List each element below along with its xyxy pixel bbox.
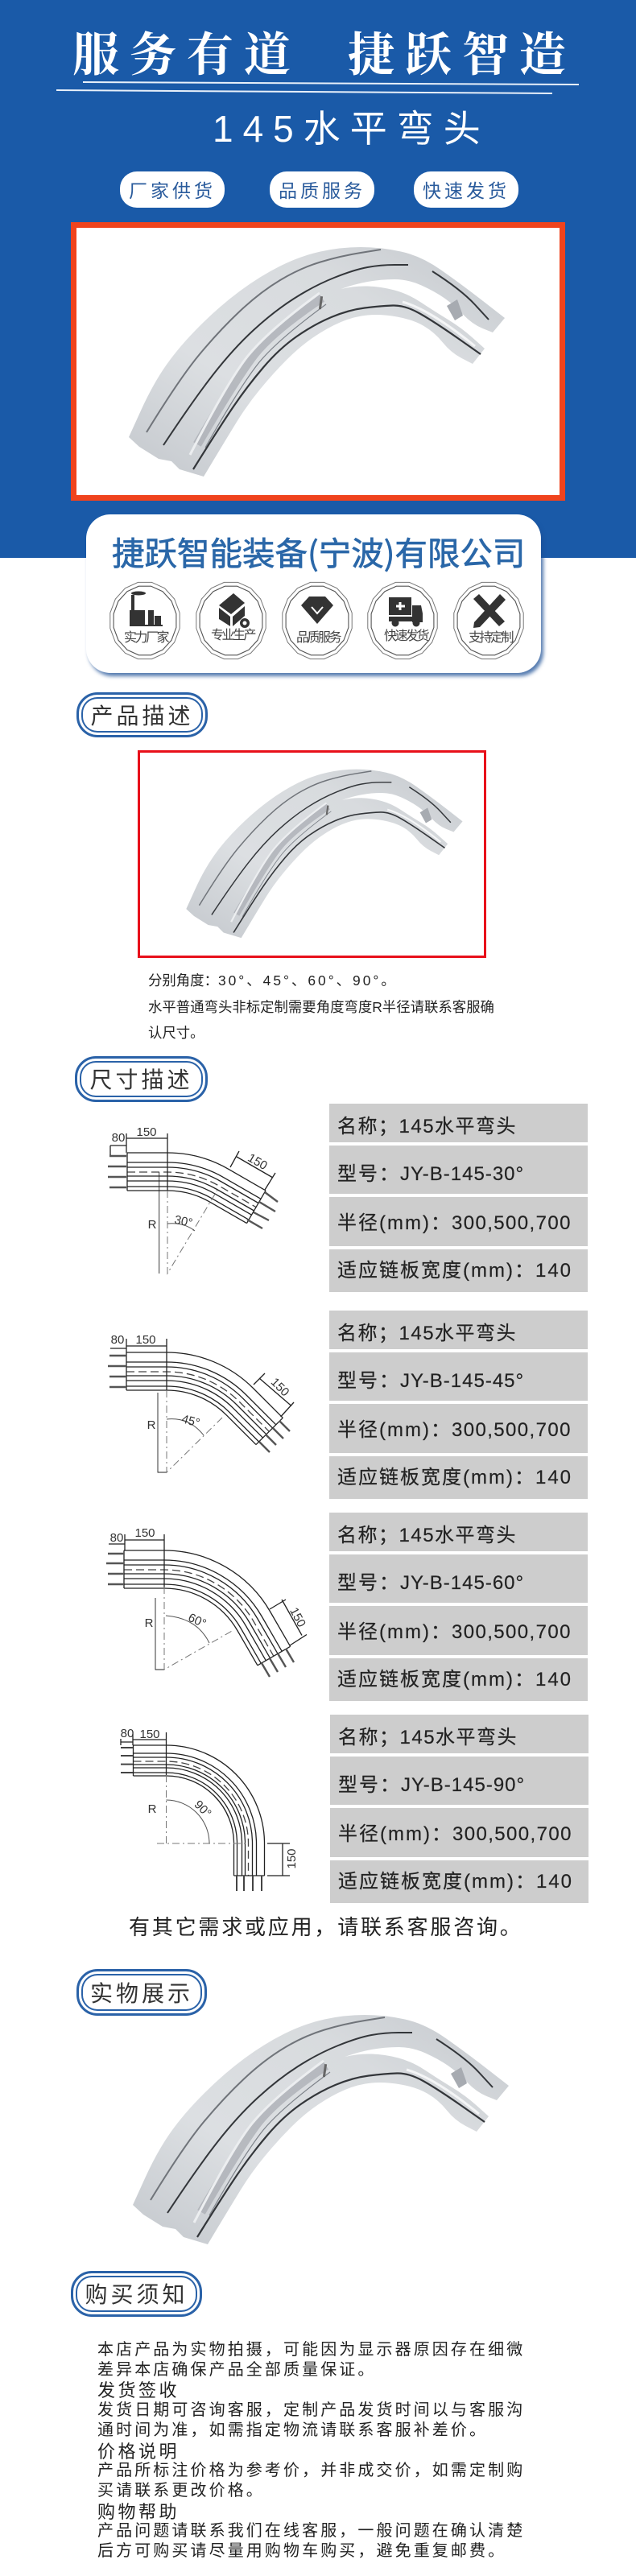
- dimension drawing: 45 degrees: 80: [111, 1333, 124, 1347]
- title underline strokes: [56, 82, 579, 93]
- subtitle: 145水平弯头: [213, 108, 490, 150]
- panel: description product frame: [138, 750, 486, 958]
- description text: 分别角度：30°、45°、60°、90°。: [148, 972, 398, 989]
- dimension drawing: 90 degrees: R: [148, 1802, 157, 1816]
- section tag: 产品描述: 产品描述: [90, 699, 193, 731]
- pill: 品质服务: [270, 171, 374, 208]
- spec table: 30 degrees: 型号：JY-B-145-30°: [337, 1163, 524, 1185]
- icon: pencil and ruler: [473, 594, 506, 628]
- spec table: 90 degrees: [330, 1715, 589, 1903]
- icon: box and gear: [219, 593, 250, 628]
- dimension drawing: 90 degrees: 90°: [192, 1798, 214, 1820]
- notes text block: 差异本店确保产品全部质量保证。: [97, 2361, 377, 2379]
- dimension drawing: 90 degrees: 150: [139, 1728, 160, 1741]
- spec table: 90 degrees: 适应链板宽度(mm)：140: [338, 1871, 573, 1893]
- badge: 实力厂家: 实力厂家: [124, 630, 169, 645]
- spec table: 30 degrees: 名称；145水平弯头: [337, 1116, 517, 1137]
- contact note: 有其它需求或应用，请联系客服咨询。: [129, 1915, 523, 1939]
- spec table: 90 degrees: 名称；145水平弯头: [338, 1727, 518, 1748]
- product photo: main: [129, 247, 505, 477]
- dimension drawing: 60 degrees: 60°: [186, 1611, 209, 1631]
- badge: 快速发货: [368, 582, 437, 659]
- icon: factory: [130, 591, 163, 626]
- notes text block: 价格说明: [97, 2442, 180, 2462]
- company name: 捷跃智能装备(宁波)有限公司: [112, 527, 525, 575]
- badge: 实力厂家: [110, 582, 180, 659]
- badge: 专业生产: [196, 582, 266, 659]
- notes text block: 发货日期可咨询客服，定制产品发货时间以与客服沟: [97, 2401, 525, 2419]
- dimension drawing: 90 degrees: 80: [121, 1727, 134, 1740]
- dimension drawing: 60 degrees: 150: [287, 1605, 308, 1629]
- spec table: 30 degrees: [329, 1104, 588, 1292]
- dimension drawing: 45 degrees: 150: [135, 1333, 156, 1347]
- section tag: 尺寸描述: [75, 1056, 208, 1102]
- dimension drawing: 45 degrees: 45°: [180, 1412, 201, 1430]
- panel: main product frame: [71, 222, 565, 501]
- section tag: 购买须知: 购买须知: [85, 2277, 188, 2310]
- spec table: 60 degrees: 型号：JY-B-145-60°: [337, 1572, 524, 1594]
- notes text block: 本店产品为实物拍摄，可能因为显示器原因存在细微: [97, 2341, 525, 2359]
- section tag: 购买须知: [71, 2271, 202, 2317]
- spec table: 45 degrees: 半径(mm)：300,500,700: [337, 1419, 572, 1441]
- dimension drawing: 90 degrees: [121, 1727, 299, 1891]
- spec table: 90 degrees: 型号：JY-B-145-90°: [338, 1774, 525, 1796]
- product photo: description: [186, 770, 463, 938]
- dimension drawing: 30 degrees: 150: [136, 1125, 157, 1139]
- dimension drawing: 60 degrees: R: [145, 1616, 154, 1630]
- dimension drawing: 30 degrees: 80: [112, 1131, 125, 1145]
- description text: 水平普通弯头非标定制需要角度弯度R半径请联系客服确: [148, 998, 494, 1014]
- dimension drawing: 30 degrees: 150: [246, 1151, 270, 1173]
- notes text block: [97, 2341, 525, 2560]
- pill: 厂家供货: [120, 171, 225, 208]
- notes text block: 买请联系更改价格。: [97, 2482, 265, 2500]
- spec table: 45 degrees: 适应链板宽度(mm)：140: [337, 1467, 572, 1488]
- dimension drawing: 45 degrees: [108, 1333, 294, 1472]
- spec table: 45 degrees: 型号：JY-B-145-45°: [337, 1370, 524, 1392]
- badge: 快速发货: 快速发货: [384, 629, 429, 643]
- notes text block: 后方可购买请尽量用购物车购买，避免重复邮费。: [97, 2542, 506, 2560]
- pill: 快速发货: [414, 171, 518, 208]
- notes text block: 通时间为准，如需指定物流请联系客服补差价。: [97, 2421, 488, 2439]
- spec table: 60 degrees: 半径(mm)：300,500,700: [337, 1621, 572, 1643]
- badge: 支持定制: 支持定制: [469, 630, 513, 645]
- spec table: 45 degrees: 名称；145水平弯头: [337, 1323, 517, 1344]
- dimension drawing: 60 degrees: 80: [110, 1531, 123, 1545]
- header background: [0, 0, 636, 558]
- dimension drawing: 30 degrees: [108, 1125, 278, 1274]
- badge: 专业生产: 专业生产: [211, 628, 255, 642]
- dimension drawing: 60 degrees: 150: [134, 1526, 155, 1540]
- notes text block: 购物帮助: [97, 2502, 180, 2522]
- section tag: 尺寸描述: 尺寸描述: [89, 1063, 193, 1095]
- section tag: 产品描述: [76, 692, 208, 737]
- spec table: 60 degrees: 适应链板宽度(mm)：140: [337, 1669, 572, 1690]
- description text: 认尺寸。: [148, 1025, 204, 1041]
- badge: 品质服务: 品质服务: [296, 630, 341, 645]
- dimension drawing: 30 degrees: R: [148, 1218, 157, 1232]
- spec table: 30 degrees: 适应链板宽度(mm)：140: [337, 1260, 572, 1282]
- section tag: 实物展示: 实物展示: [90, 1976, 193, 2008]
- dimension drawing: 45 degrees: R: [147, 1418, 156, 1432]
- icon: diamond: [301, 597, 333, 624]
- spec table: 60 degrees: [329, 1513, 588, 1701]
- title: 服务有道 捷跃智造: [72, 17, 576, 85]
- dimension drawing: 30 degrees: 30°: [173, 1213, 194, 1230]
- spec table: 60 degrees: 名称；145水平弯头: [337, 1525, 517, 1546]
- description text: [148, 972, 494, 1041]
- notes text block: 产品所标注价格为参考价，并非成交价，如需定制购: [97, 2462, 525, 2479]
- product photo: display: [133, 2015, 509, 2244]
- notes text block: 产品问题请联系我们在线客服，一般问题在确认清楚: [97, 2522, 525, 2540]
- pill: 厂家供货: 厂家供货: [129, 175, 216, 203]
- pill: 品质服务: 品质服务: [279, 175, 365, 203]
- dimension drawing: 60 degrees: [106, 1526, 308, 1677]
- spec table: 90 degrees: 半径(mm)：300,500,700: [338, 1823, 572, 1845]
- badge: 品质服务: [283, 582, 352, 659]
- spec table: 30 degrees: 半径(mm)：300,500,700: [337, 1212, 572, 1234]
- pill: 快速发货: 快速发货: [423, 175, 510, 203]
- spec table: 45 degrees: [329, 1311, 588, 1499]
- icon: truck: [389, 597, 423, 626]
- badge: 支持定制: [454, 582, 523, 659]
- notes text block: 发货签收: [97, 2380, 180, 2401]
- dimension drawing: 90 degrees: 150: [285, 1848, 299, 1869]
- section tag: 实物展示: [76, 1969, 207, 2016]
- panel: company card: [86, 514, 541, 673]
- dimension drawing: 45 degrees: 150: [268, 1375, 292, 1399]
